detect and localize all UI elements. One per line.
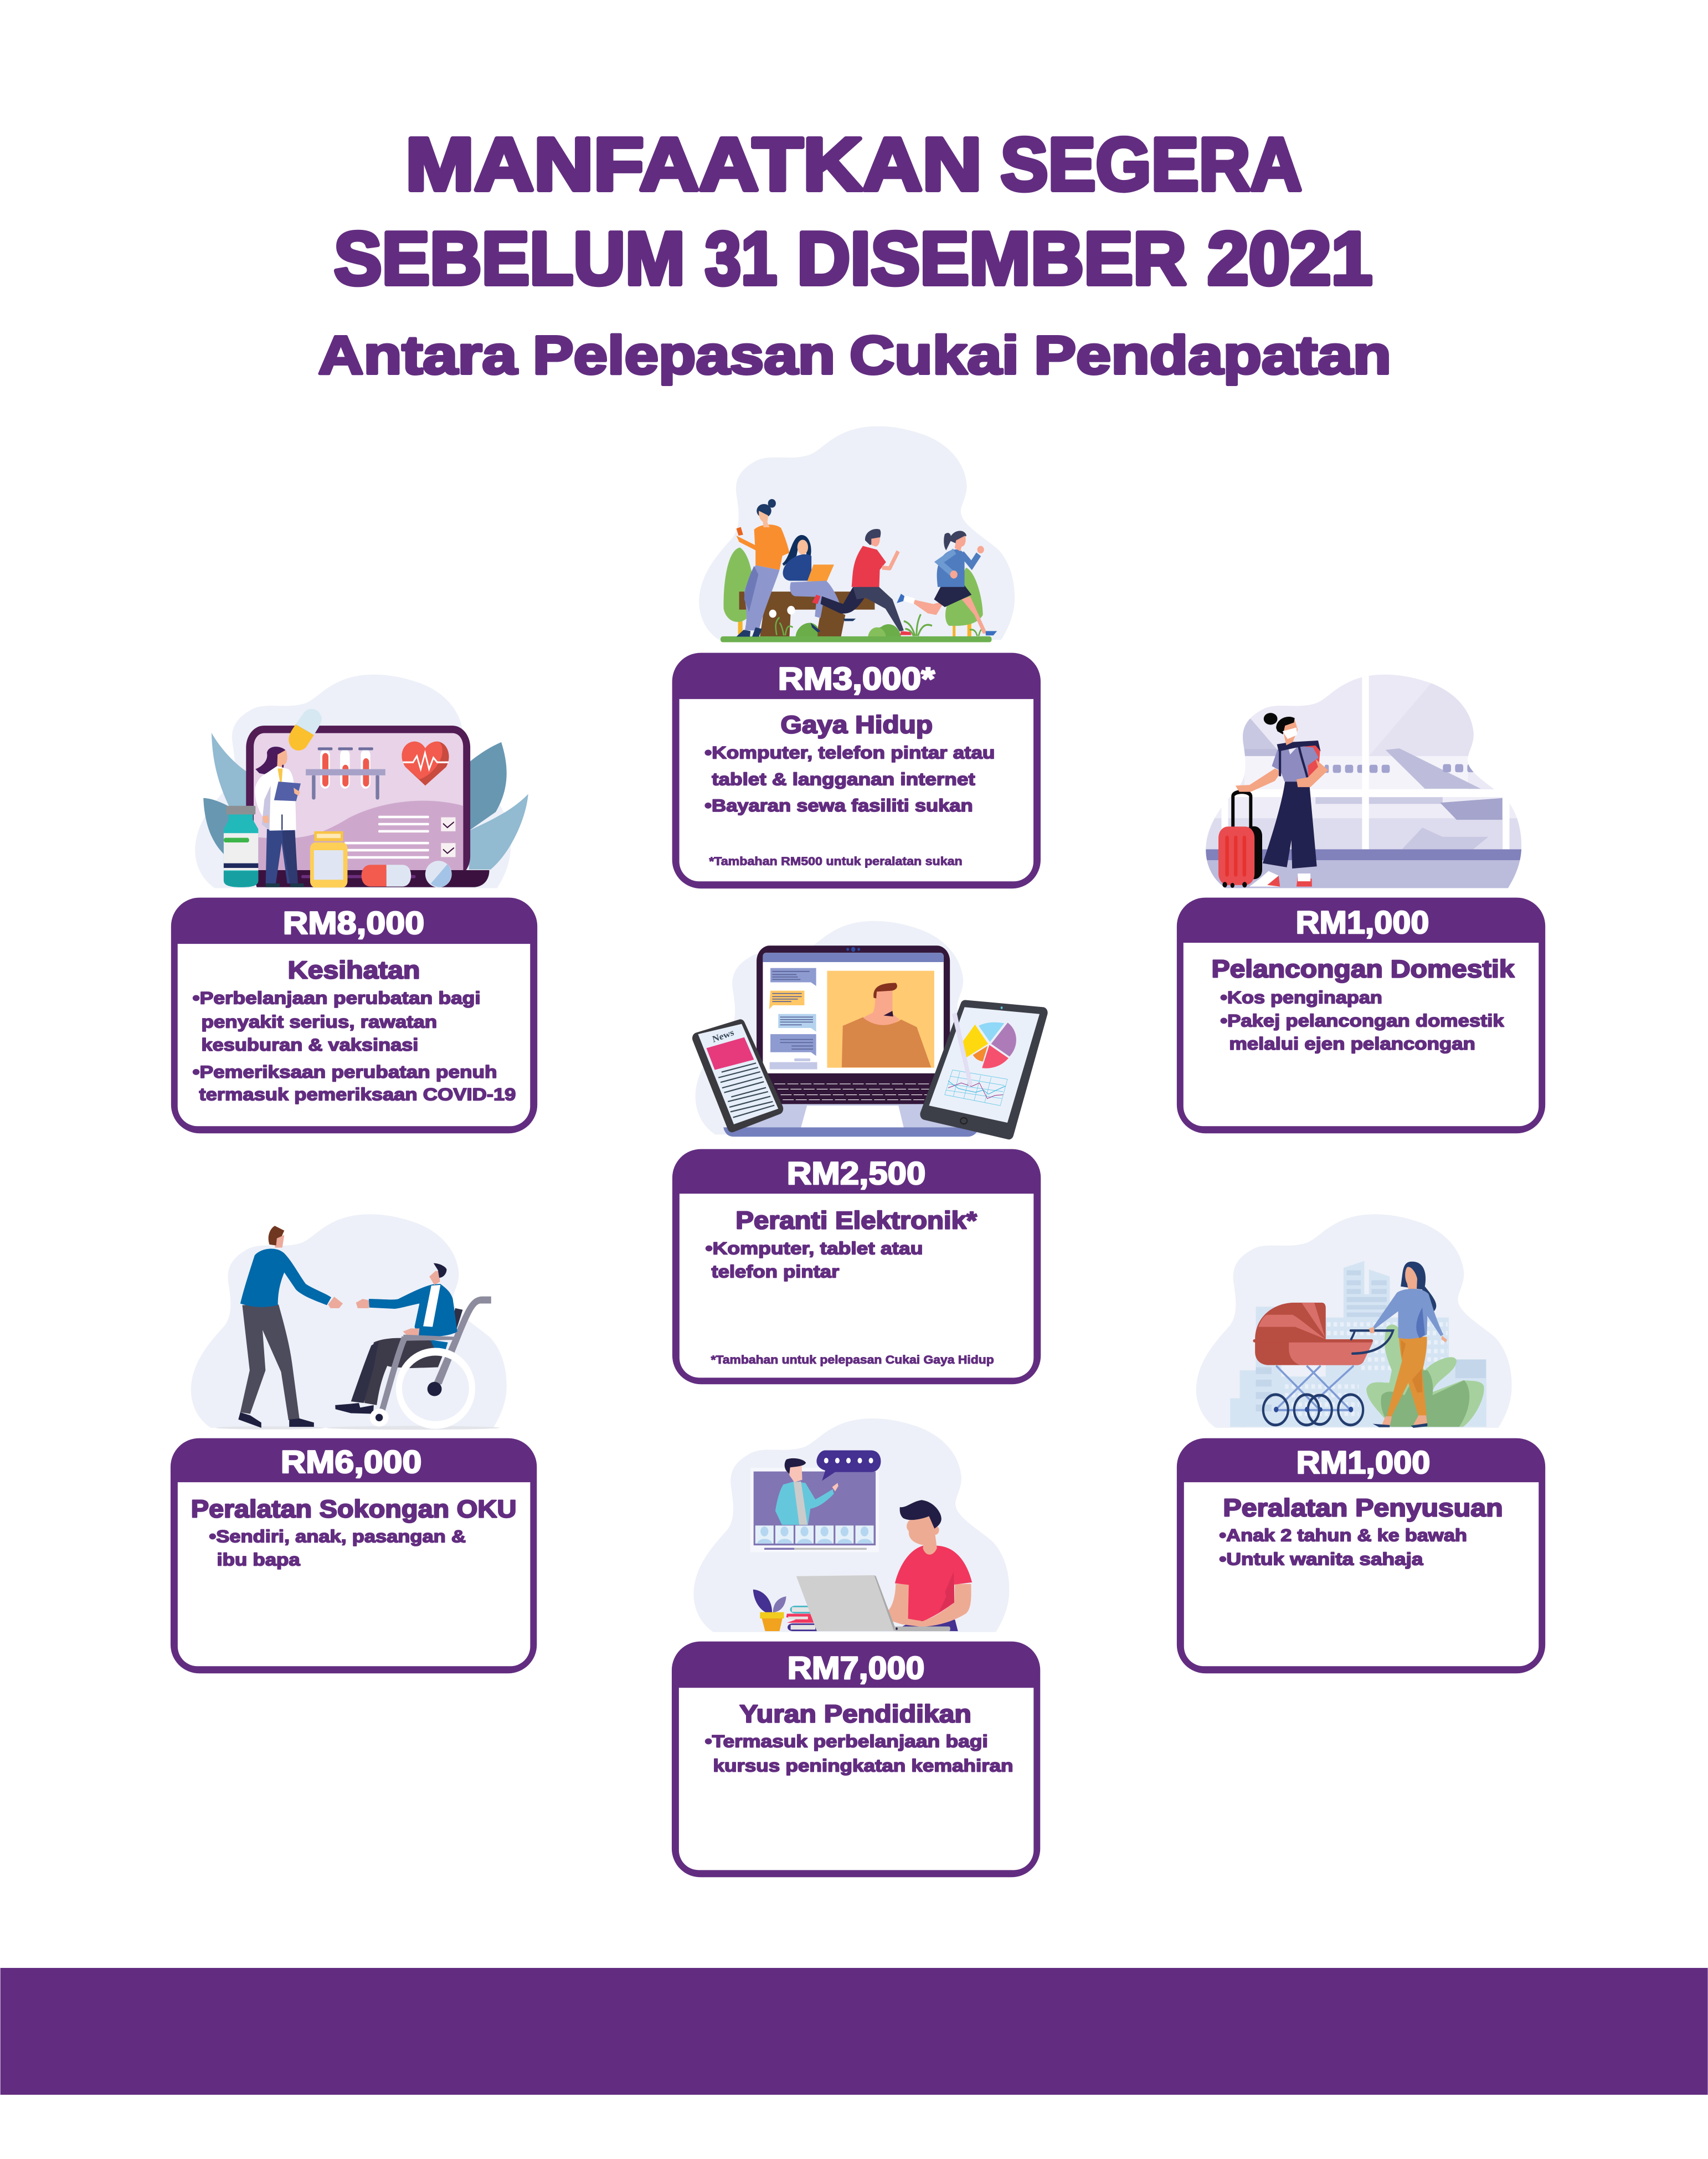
heading: Peranti Elektronik* bbox=[735, 1207, 978, 1235]
title: SEGERA bbox=[1001, 122, 1302, 206]
title: 2021 bbox=[1207, 217, 1372, 300]
bullet list: •Kos penginapan bbox=[1220, 988, 1382, 1007]
panel: Peranti Elektronik bbox=[672, 921, 1043, 1384]
amount: RM2,500 bbox=[787, 1156, 925, 1191]
amount: RM6,000 bbox=[281, 1445, 421, 1480]
bullet list: •Pakej pelancongan domestik bbox=[1220, 1010, 1504, 1030]
heading: Kesihatan bbox=[288, 957, 420, 984]
heading: Gaya Hidup bbox=[781, 711, 933, 739]
bullet list: •Sendiri, anak, pasangan & bbox=[209, 1526, 466, 1546]
illustration: traveller at airport window bbox=[1206, 675, 1521, 888]
footnote: *Tambahan RM500 untuk peralatan sukan bbox=[709, 855, 963, 868]
illustration: people exercising in the park bbox=[699, 426, 1015, 642]
bullet list bbox=[706, 1238, 923, 1281]
bullet list: •Bayaran sewa fasiliti sukan bbox=[704, 795, 973, 815]
amount: RM3,000* bbox=[778, 661, 935, 697]
card frame bbox=[672, 1149, 1041, 1384]
bullet list: kursus peningkatan kemahiran bbox=[713, 1755, 1014, 1775]
title bbox=[334, 122, 1372, 300]
bullet list: •Komputer, tablet atau bbox=[706, 1238, 923, 1258]
bullet list bbox=[1219, 1525, 1467, 1569]
bullet list bbox=[1220, 988, 1504, 1053]
bullet list: •Anak 2 tahun & ke bawah bbox=[1219, 1525, 1467, 1545]
panel: Kesihatan bbox=[171, 675, 537, 1133]
heading: Pelancongan Domestik bbox=[1212, 955, 1515, 983]
bullet list: •Komputer, telefon pintar atau bbox=[704, 743, 995, 763]
illustration: doctor and medical laptop bbox=[195, 675, 528, 888]
amount: RM7,000 bbox=[788, 1651, 924, 1686]
bullet list: ibu bapa bbox=[217, 1549, 300, 1569]
bullet list bbox=[704, 743, 995, 815]
bullet list: •Pemeriksaan perubatan penuh bbox=[193, 1062, 497, 1082]
title: DISEMBER bbox=[797, 217, 1186, 300]
illustration: laptop, phone and tablet bbox=[696, 921, 1043, 1137]
illustration: mother with pram bbox=[1196, 1214, 1512, 1428]
subtitle: Pendapatan bbox=[1034, 325, 1391, 385]
bullet list bbox=[705, 1731, 1014, 1775]
card frame bbox=[171, 898, 537, 1133]
bullet list bbox=[209, 1526, 466, 1569]
panel: Yuran Pendidikan bbox=[672, 1418, 1040, 1877]
subtitle: Antara bbox=[318, 325, 518, 385]
bullet list: termasuk pemeriksaan COVID-19 bbox=[199, 1084, 516, 1104]
illustration: handshake with wheelchair user bbox=[191, 1214, 507, 1430]
subtitle bbox=[318, 325, 1391, 385]
newspaper label: News bbox=[711, 1027, 735, 1045]
title: MANFAATKAN bbox=[405, 122, 982, 206]
card frame bbox=[672, 1642, 1040, 1877]
heading: Peralatan Sokongan OKU bbox=[191, 1495, 517, 1523]
illustration: online learning bbox=[693, 1418, 1009, 1632]
amount: RM1,000 bbox=[1297, 1445, 1430, 1481]
footnote: *Tambahan untuk pelepasan Cukai Gaya Hidup bbox=[711, 1354, 994, 1366]
bullet list: penyakit serius, rawatan bbox=[202, 1011, 437, 1031]
bullet list: telefon pintar bbox=[712, 1261, 839, 1281]
bullet list bbox=[193, 988, 516, 1104]
bullet list: melalui ejen pelancongan bbox=[1229, 1034, 1475, 1053]
bullet list: tablet & langganan internet bbox=[712, 769, 975, 789]
card frame bbox=[1177, 1438, 1545, 1673]
title: 31 bbox=[705, 217, 777, 300]
panel: Peralatan Penyusuan bbox=[1177, 1214, 1545, 1673]
bullet list: •Perbelanjaan perubatan bagi bbox=[193, 988, 481, 1008]
heading: Peralatan Penyusuan bbox=[1223, 1494, 1503, 1522]
panel: Pelancongan Domestik bbox=[1177, 666, 1545, 1133]
amount: RM8,000 bbox=[283, 906, 424, 941]
subtitle: Pelepasan bbox=[533, 325, 835, 385]
bullet list: •Termasuk perbelanjaan bagi bbox=[705, 1731, 988, 1751]
panel: Peralatan Sokongan OKU bbox=[171, 1214, 537, 1673]
subtitle: Cukai bbox=[850, 325, 1019, 385]
title: SEBELUM bbox=[334, 217, 685, 300]
card frame bbox=[672, 653, 1041, 888]
bullet list: •Untuk wanita sahaja bbox=[1219, 1549, 1423, 1569]
footer band bbox=[1, 1968, 1708, 2095]
heading: Yuran Pendidikan bbox=[739, 1700, 971, 1728]
card frame bbox=[1177, 898, 1545, 1133]
card frame bbox=[171, 1438, 537, 1673]
amount: RM1,000 bbox=[1296, 905, 1429, 940]
panel: Gaya Hidup bbox=[672, 426, 1041, 888]
bullet list: kesuburan & vaksinasi bbox=[202, 1035, 418, 1055]
